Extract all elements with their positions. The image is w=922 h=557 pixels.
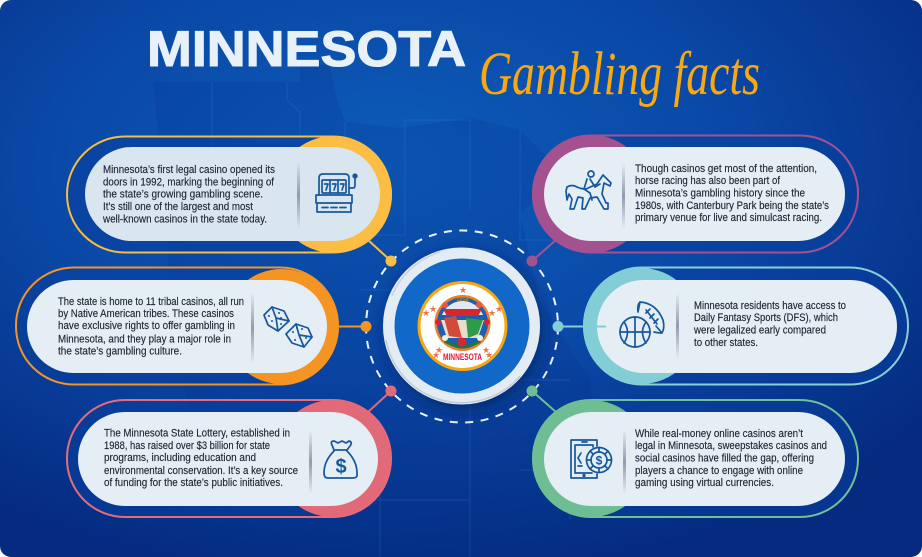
panel: horse racing (526, 135, 858, 266)
text: casino fact: the state’s growing gambling scene. (103, 188, 263, 200)
text: online casinos fact: players a chance to engage with online (635, 465, 803, 477)
text: lottery fact: environmental conservation. It’s a key source (104, 465, 298, 477)
text: casino fact: Minnesota’s first legal casino opened its (103, 164, 275, 176)
text: horse racing fact: Though casinos get most of the attention, (635, 163, 817, 175)
icon: basketball and football (620, 302, 664, 347)
text: horse racing fact: 1980s, with Canterbury Park being the state’s (635, 200, 829, 212)
stars: ★ (488, 308, 496, 318)
year: 1858 (456, 297, 469, 303)
text: tribal casinos fact: the state’s gambling culture. (58, 346, 182, 358)
stars: ★ (435, 345, 443, 355)
icon symbol: chip dollar: $ (596, 454, 603, 468)
seal label: MINNESOTA (443, 352, 482, 363)
text: lottery fact: The Minnesota State Lottery, established in (104, 428, 290, 440)
stars: ★ (429, 304, 437, 314)
panel: tribal casinos (16, 268, 372, 384)
icon: slot machine (316, 174, 357, 212)
text: tribal casinos fact: have exclusive rights to offer gambling in (58, 320, 235, 332)
text: DFS fact: were legalized early compared (693, 324, 826, 336)
text: casino fact: It’s still one of the largest and most (103, 201, 253, 213)
text: lottery fact (104, 428, 298, 489)
center medallion (383, 248, 540, 404)
text: DFS fact: to other states. (694, 337, 758, 349)
text: lottery fact: 1988, has raised over $3 billion for state (104, 440, 270, 452)
dashed ring (366, 230, 558, 422)
text: tribal casinos fact: The state is home to 11 tribal casinos, all run (58, 296, 244, 308)
text: horse racing fact: Minnesota’s gambling history since the (635, 188, 805, 200)
text: DFS fact: Minnesota residents have access to (694, 300, 846, 312)
title: Minnesota: MINNESOTA (147, 21, 466, 77)
stars: ★ (495, 304, 503, 314)
text: online casinos fact (635, 428, 827, 489)
text: tribal casinos fact: by Native American tribes. These casinos (58, 308, 234, 320)
panel: state lottery (67, 386, 396, 517)
text: lottery fact: programs, including education and (104, 452, 256, 464)
text: online casinos fact: While real-money online casinos aren’t (635, 428, 803, 440)
text: DFS fact (693, 300, 846, 349)
text: lottery fact: of funding for the state’s public initiatives. (104, 477, 283, 489)
text: horse racing fact: horse racing has also been part of (635, 175, 780, 187)
icon: horse and rider (566, 171, 611, 209)
text: horse racing fact (635, 163, 829, 224)
map silhouette (212, 82, 570, 557)
flag seal (419, 282, 506, 370)
stars: ★ (482, 345, 490, 355)
icon symbol: dollar: $ (335, 456, 347, 478)
text: online casinos fact: gaming using virtual currencies. (635, 477, 774, 489)
text: online casinos fact: legal in Minnesota, sweepstakes casinos and (635, 440, 827, 452)
text: tribal casinos fact: Minnesota, and they play a major role in (58, 334, 231, 346)
icon: dice (264, 307, 312, 347)
text: DFS fact: Daily Fantasy Sports (DFS), which (694, 312, 838, 324)
stars: ★ (432, 350, 440, 360)
stars: ★ (485, 350, 493, 360)
text: horse racing fact: primary venue for live and simulcast racing. (635, 212, 822, 224)
panel: first legal casino (67, 136, 396, 266)
stars: ★ (422, 308, 430, 318)
text: casino fact: well-known casinos in the state today. (102, 214, 267, 226)
text: online casinos fact: social casinos have filled the gap, offering (635, 452, 814, 464)
icon: money bag (324, 441, 357, 478)
text: casino fact (102, 164, 275, 226)
stars: ★ (459, 285, 467, 295)
panel: daily fantasy sports (552, 268, 908, 384)
text: tribal casinos fact (58, 296, 244, 358)
icon: phone and casino chip (571, 440, 612, 478)
panel: online casinos (526, 386, 858, 517)
text: casino fact: doors in 1992, marking the beginning of (103, 176, 274, 188)
subtitle: Gambling facts: Gambling facts (479, 40, 760, 108)
